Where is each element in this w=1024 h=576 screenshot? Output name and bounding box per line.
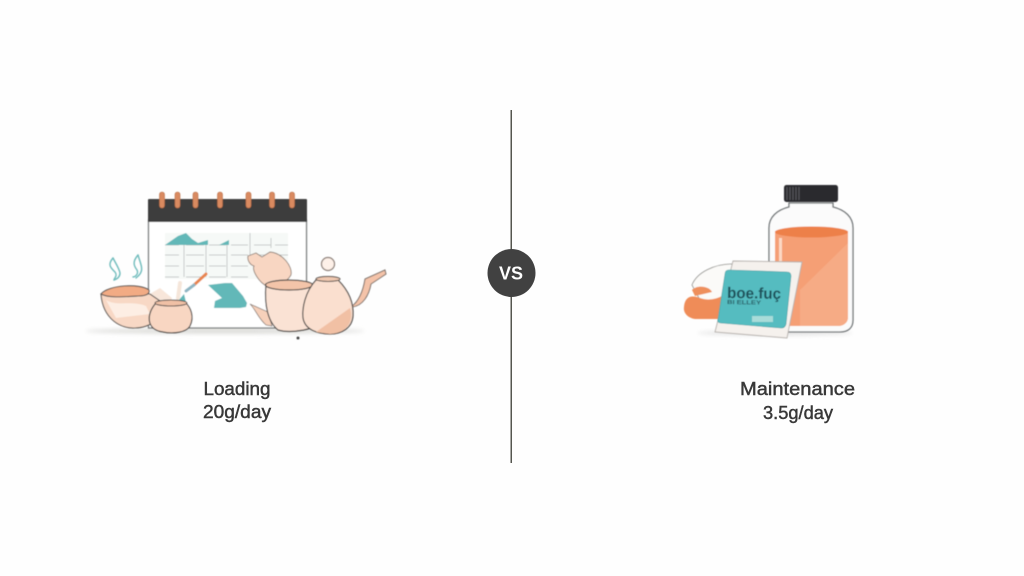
icon: tilted upper pot: [248, 252, 291, 287]
icon: calendar: [148, 192, 307, 328]
jar cap: [784, 185, 838, 202]
icon: small pot: [149, 300, 192, 333]
calendar rings: [160, 192, 294, 208]
jar liquid: [775, 231, 848, 326]
icon: brush accent: [178, 274, 206, 298]
divider line: [510, 110, 512, 463]
packet label: boe.fuç: [727, 285, 782, 303]
icon: teapot: [296, 258, 386, 340]
label: Maintenance: Maintenance: [740, 379, 855, 399]
value: 3.5g/day: 3.5g/day: [763, 403, 833, 423]
teal marks on calendar: [165, 233, 247, 308]
icon: orange pouch: [684, 264, 735, 319]
ground shadow: [85, 328, 365, 334]
calendar grid: [165, 233, 288, 277]
packet small text: BI ELLEY: [727, 300, 761, 307]
value: 20g/day: 20g/day: [203, 402, 271, 422]
icon: large pot: [250, 280, 312, 331]
ground shadow: [697, 331, 853, 335]
illustration: loading phase calendar and teapots: [85, 192, 386, 340]
icon: steam: [110, 255, 142, 280]
badge: VS: [488, 249, 536, 297]
illustration: maintenance jar and packet: [684, 185, 853, 338]
label: Loading: Loading: [204, 379, 270, 399]
icon: left bowl: [101, 286, 172, 328]
icon: packet: [715, 261, 802, 338]
icon: jar: [769, 185, 853, 332]
badge: VS: VS: [499, 264, 523, 284]
